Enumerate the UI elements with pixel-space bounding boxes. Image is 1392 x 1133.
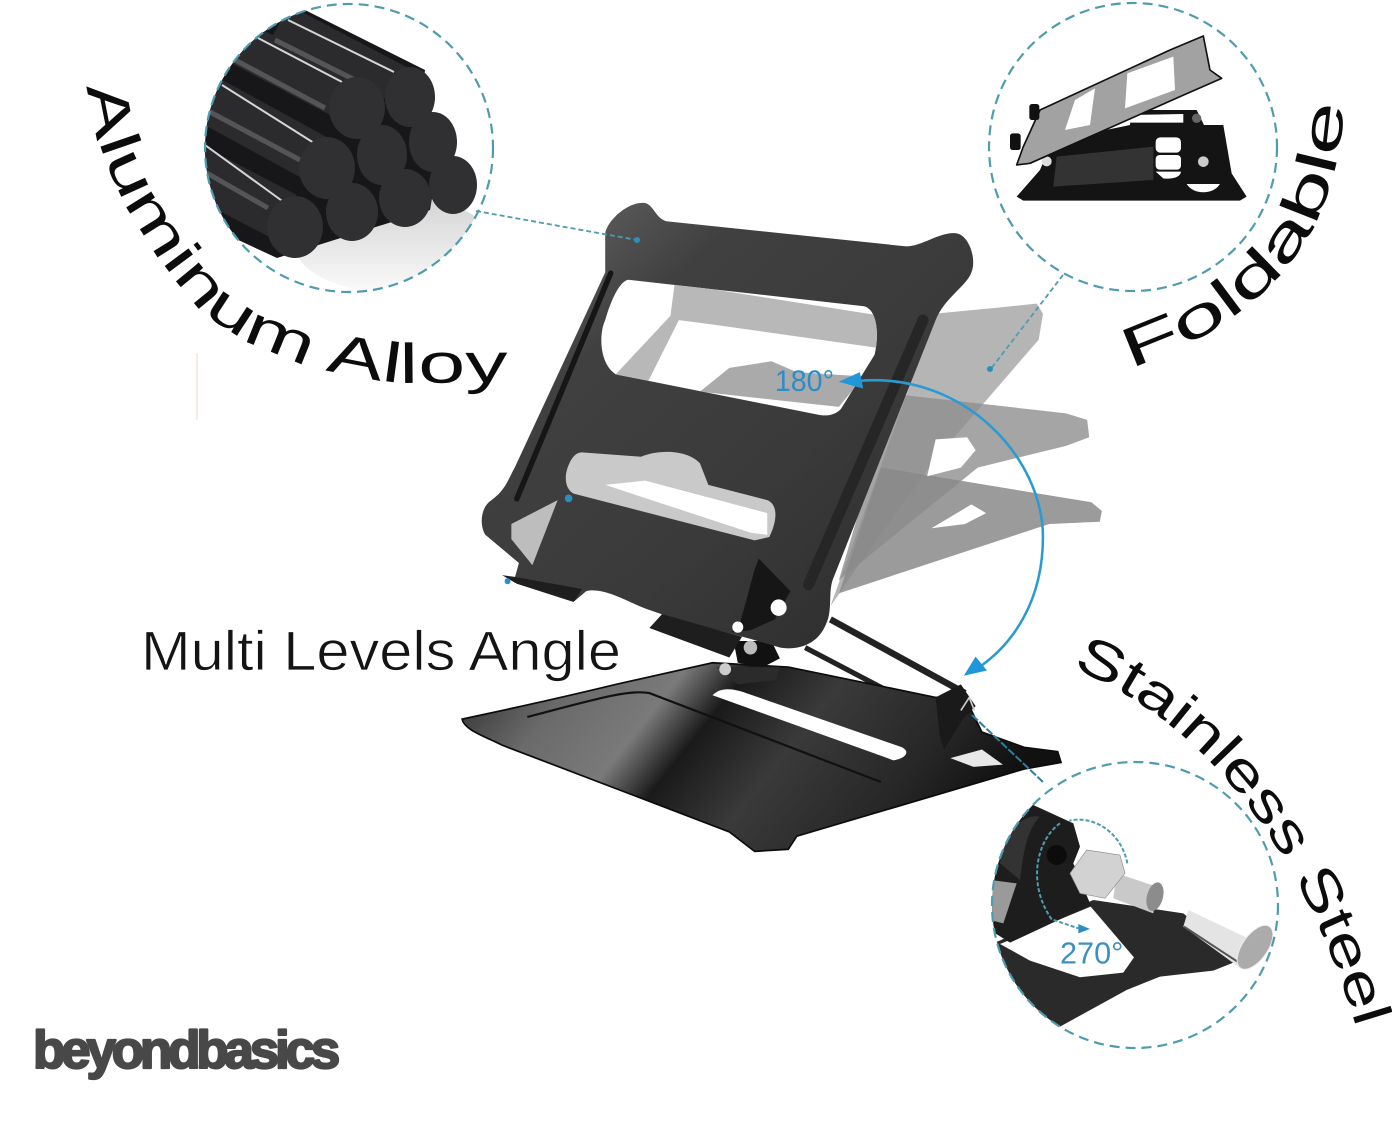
panel: aluminum rods callout [195,4,495,293]
floor shadow [298,200,474,284]
label: Multi Levels Angle: Multi Levels Angle [141,619,621,682]
rotation arrow head [1078,924,1090,933]
rod end faces [267,67,477,258]
lower window [566,452,775,540]
brand wordmark: beyondbasics [33,1021,339,1080]
curved heading: Foldable: Foldable [1123,106,1343,366]
upper window [601,280,881,415]
side slots [517,273,923,585]
base plate [462,663,1061,851]
foldable angle arc arrow [839,372,1043,676]
angle label 270: 270° [1060,936,1123,970]
callout dots on panel [505,494,572,584]
curved heading: Aluminum Alloy: Aluminum Alloy [86,86,508,394]
hinge arms [805,619,965,708]
ghost positions of the folding panel [830,304,1102,606]
rod mass [195,10,440,258]
folded base [1017,110,1247,201]
main laptop stand illustration [462,203,1102,851]
upper bracket [990,800,1091,943]
panel: stainless steel hinge callout [990,762,1280,1048]
steel bolt parts [1070,850,1280,975]
rod bodies [195,22,400,217]
connector: foldable callout line [987,275,1063,372]
angle label 180: 180° [775,366,834,398]
rotation arc [1037,820,1127,928]
rod highlights [205,20,394,203]
corner cut-out [511,500,558,565]
connector: aluminum callout line [476,211,640,243]
faint margin mark [196,353,198,420]
connector: stainless steel callout line [972,715,1043,782]
curved heading: Stainless Steel: Stainless Steel [1078,640,1392,1024]
white gap [1000,907,1134,977]
panel: folded stand callout [989,3,1277,291]
lower bracket arm [993,900,1240,1027]
folded top plate [1010,36,1222,165]
front lip tabs [502,575,742,658]
hinge blocks [717,641,976,749]
corner bracket with hole [731,559,790,633]
tilted panel [482,203,973,658]
